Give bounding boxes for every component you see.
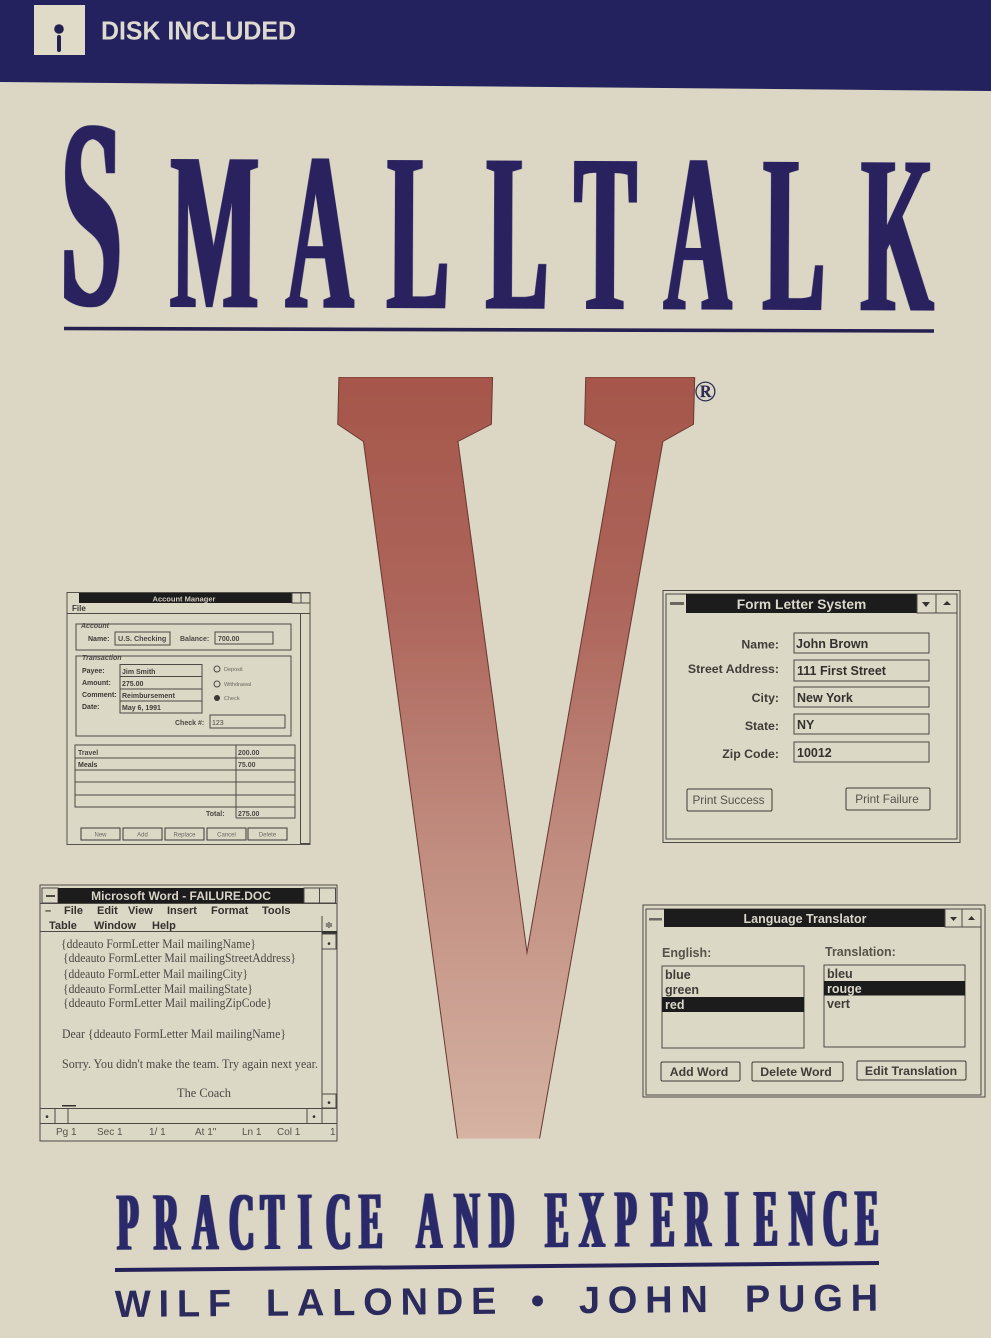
account group: Name: [88, 636, 109, 643]
menu bar: – [45, 905, 51, 917]
title bar [79, 593, 310, 604]
translation list: bleu [827, 967, 853, 981]
transaction group: Check [224, 696, 240, 702]
form labels: Name: [741, 638, 779, 652]
transaction group: May 6, 1991 [122, 705, 161, 712]
authors: PUGH [745, 1278, 886, 1321]
English list [662, 966, 804, 1048]
translation list: vert [827, 997, 851, 1011]
document text: {ddeauto FormLetter Mail mailingCity} [63, 967, 248, 981]
screenshot: Language Translator window: Translation: [825, 945, 896, 959]
screenshot: Language Translator window [643, 905, 985, 1097]
form fields: NY [797, 718, 815, 732]
vertical scrollbar: • [327, 1098, 331, 1109]
expense table: 200.00 [238, 750, 260, 757]
form labels: City: [752, 691, 779, 705]
status bar [56, 1127, 336, 1138]
subtitle rule [115, 1263, 879, 1270]
buttons: New [94, 832, 107, 838]
status bar: Sec 1 [97, 1127, 123, 1138]
form fields [794, 633, 929, 762]
title bar [670, 594, 957, 613]
English list: green [665, 983, 699, 997]
title bar: Microsoft Word - FAILURE.DOC [91, 889, 271, 903]
horizontal scrollbar [40, 1108, 337, 1124]
top banner [0, 0, 991, 91]
status bar: 1/ 1 [149, 1127, 166, 1138]
document text: {ddeauto FormLetter Mail mailingStreetAddress} [63, 951, 296, 965]
form labels: Street Address: [688, 662, 779, 676]
form fields: 111 First Street [797, 664, 887, 678]
authors: • [531, 1280, 552, 1323]
status bar: At 1" [195, 1127, 217, 1138]
form fields: 10012 [797, 746, 832, 760]
vertical scrollbar: ≑ [325, 920, 333, 931]
screenshot: Account Manager window [67, 592, 310, 844]
form labels [688, 638, 779, 761]
document text: Sorry. You didn't make the team. Try again next year. [62, 1057, 318, 1071]
transaction group: Deposit [224, 667, 243, 673]
title rule [64, 328, 934, 331]
status bar: Col 1 [277, 1127, 301, 1138]
title: Smalltalk: S [60, 62, 123, 364]
expense table: 75.00 [238, 762, 256, 769]
form buttons: Print Success [692, 793, 765, 807]
form labels: Zip Code: [722, 747, 779, 761]
authors [115, 1278, 886, 1326]
menu bar: Edit [97, 905, 118, 917]
icon: disk [34, 5, 85, 55]
translator buttons: Delete Word [760, 1065, 832, 1079]
account group: Account [80, 623, 110, 630]
vertical scrollbar [322, 916, 337, 1109]
title bar: Language Translator [744, 912, 867, 926]
status bar: Pg 1 [56, 1127, 77, 1138]
screenshot: Form Letter System window [663, 590, 960, 842]
transaction group: Check #: [175, 720, 204, 727]
horizontal scrollbar: • [312, 1112, 316, 1123]
menu bar: Window [94, 920, 136, 932]
translation list [824, 965, 965, 1047]
buttons [81, 828, 287, 840]
English list: blue [665, 968, 691, 982]
authors: JOHN [579, 1279, 716, 1322]
menu bar [40, 904, 337, 932]
status bar: 1 [330, 1127, 336, 1138]
transaction group: 275.00 [122, 681, 144, 688]
translation list: rouge [827, 982, 862, 996]
registered mark: ® [694, 375, 716, 408]
status bar: Ln 1 [242, 1127, 262, 1138]
menu bar: File [64, 905, 83, 917]
authors: LALONDE [266, 1281, 504, 1325]
transaction group: Withdrawal [224, 682, 251, 688]
form labels: State: [745, 719, 779, 733]
document text: {ddeauto FormLetter Mail mailingName} [61, 937, 256, 951]
subtitle: Practice and Experience: PRACTICE AND EXPERIENCE [117, 1171, 879, 1268]
transaction group: Reimbursement [122, 693, 176, 700]
form fields: New York [797, 691, 853, 705]
buttons: Add [137, 832, 148, 838]
title bar [42, 888, 336, 903]
authors: WILF [115, 1283, 239, 1326]
menu bar: Insert [167, 905, 197, 917]
expense table: 275.00 [238, 811, 260, 818]
transaction group: Date: [82, 704, 100, 711]
title bar: Form Letter System [737, 597, 866, 612]
transaction group: 123 [212, 720, 224, 727]
menu bar: Help [152, 920, 176, 932]
translator buttons [661, 1061, 966, 1081]
translator buttons: Add Word [670, 1065, 728, 1079]
transaction group: Jim Smith [122, 669, 155, 676]
menu bar: Format [211, 905, 249, 917]
transaction group [76, 655, 291, 736]
account group: U.S. Checking [118, 634, 166, 643]
transaction group: Amount: [82, 680, 111, 687]
transaction group: Payee: [82, 668, 105, 675]
title: Smalltalk: MALLTALK [170, 107, 934, 360]
expense table: Travel [78, 750, 98, 757]
form buttons: Print Failure [855, 792, 919, 806]
account group: 700.00 [218, 636, 240, 643]
form fields: John Brown [796, 637, 868, 651]
account group: Balance: [180, 636, 209, 643]
form buttons [687, 788, 930, 811]
expense table: Meals [78, 762, 98, 769]
transaction group: Transaction [82, 655, 122, 662]
document text: {ddeauto FormLetter Mail mailingState} [63, 982, 253, 996]
buttons: Replace [173, 832, 196, 838]
document text: {ddeauto FormLetter Mail mailingZipCode} [63, 996, 272, 1010]
English list: red [665, 998, 684, 1012]
expense table [75, 745, 295, 818]
document text: The Coach [177, 1086, 231, 1100]
scrollbar [300, 614, 310, 844]
buttons: Cancel [217, 832, 236, 838]
menu bar: Table [49, 920, 77, 932]
menu bar: Tools [262, 905, 291, 917]
vertical scrollbar: • [327, 939, 331, 950]
buttons: Delete [259, 832, 277, 838]
menu bar: View [128, 905, 153, 917]
screenshot: Microsoft Word window [40, 885, 337, 1141]
translator buttons: Edit Translation [865, 1064, 957, 1078]
horizontal scrollbar: • [45, 1112, 49, 1123]
transaction group: Comment: [82, 692, 117, 699]
title bar [649, 909, 981, 927]
account group [76, 623, 291, 650]
menu: File [72, 604, 86, 613]
document text: Dear {ddeauto FormLetter Mail mailingName} [62, 1027, 286, 1041]
title bar: Account Manager [153, 594, 216, 604]
document text [61, 937, 318, 1106]
disk included label: DISK INCLUDED [101, 18, 296, 46]
column headings: English: [662, 946, 711, 960]
expense table: Total: [206, 811, 225, 818]
